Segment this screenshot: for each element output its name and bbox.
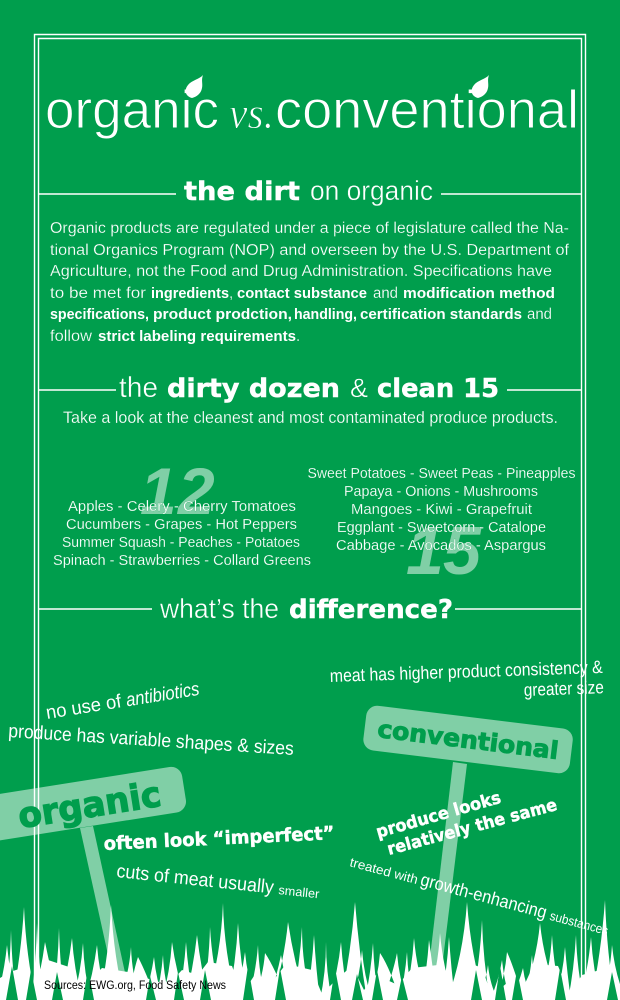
text block: the dirt on organic body: certification standards — [360, 307, 522, 323]
text block: the dirt on organic body: ingredients — [151, 286, 229, 302]
list: clean 15 — [308, 465, 576, 554]
text block: the dirt on organic body: follow — [50, 328, 93, 345]
icon: leaf over conventional — [472, 75, 489, 98]
text block: the dirt on organic body: and — [527, 306, 552, 323]
text: meat has higher product consistency: greater size — [523, 677, 604, 700]
list: clean 15: Mangoes - Kiwi - Grapefruit — [351, 501, 533, 518]
text: treated with growth-enhancing substances — [348, 851, 611, 939]
heading: the dirt on organic: on organic — [310, 175, 433, 206]
heading: the dirty dozen and clean 15: the — [119, 372, 158, 404]
text block: the dirt on organic body: Agriculture, not the Food and Drug Administration. Specifications have — [50, 263, 552, 280]
icon: leaf over organic — [186, 75, 203, 98]
text: often look imperfect: often look “imperfect” — [103, 823, 335, 855]
text: no use of antibiotics — [44, 679, 201, 724]
text: no use of antibiotics: antibiotics — [124, 679, 201, 711]
heading: the dirty dozen and clean 15: clean 15 — [377, 374, 499, 404]
text: produce looks relatively the same: produce looks — [374, 788, 503, 843]
sign post: conventional — [425, 762, 467, 1000]
title: vs. — [229, 89, 274, 138]
title: organic — [45, 80, 219, 140]
heading: what's the difference: what’s the — [159, 593, 279, 624]
text block: the dirt on organic body: strict labeling requirements — [98, 329, 296, 345]
text: treated with growth-enhancing substances: treated with — [348, 854, 420, 887]
text: cuts of meat usually smaller: cuts of meat usually — [115, 861, 275, 899]
text: cuts of meat usually smaller: smaller — [278, 883, 320, 901]
title: conventional — [275, 80, 579, 140]
text block: the dirt on organic body: . — [296, 328, 300, 345]
text block: the dirt on organic body: to be met for — [50, 285, 146, 302]
text block: the dirt on organic body — [50, 220, 570, 345]
text: meat has higher product consistency — [329, 657, 604, 700]
list: dirty dozen: Spinach - Strawberries - Collard Greens — [53, 552, 311, 569]
list: dirty dozen — [53, 498, 311, 569]
sign: conventional — [362, 704, 574, 775]
heading: the dirt on organic: the dirt — [184, 177, 300, 207]
text: produce has variable shapes and sizes: produce has variable shapes & sizes — [8, 721, 294, 760]
text block: the dirt on organic body: modification method — [403, 286, 555, 302]
sign: organic — [0, 765, 188, 844]
list: dirty dozen: Cucumbers - Grapes - Hot Peppers — [66, 516, 297, 533]
list: dirty dozen: Summer Squash - Peaches - Potatoes — [62, 534, 300, 551]
text block: the dirt on organic body: product prodction, — [153, 307, 292, 323]
list: clean 15: Sweet Potatoes - Sweet Peas - Pineapples — [308, 465, 576, 482]
number: 15: 15 — [406, 513, 482, 589]
list: dirty dozen: Apples - Celery - Cherry Tomatoes — [68, 498, 296, 515]
text block: the dirt on organic body: handling, — [294, 307, 357, 323]
number: 12: 12 — [140, 454, 215, 528]
heading: the dirty dozen and clean 15 — [38, 372, 582, 404]
text block: the dirt on organic body: contact substance — [237, 286, 367, 302]
text: produce looks relatively the same: relatively the same — [385, 795, 559, 860]
title — [45, 75, 579, 140]
text: sources: Sources: EWG.org, Food Safety News — [44, 980, 226, 992]
sign: organic: organic — [15, 775, 164, 837]
list: clean 15: Eggplant - Sweetcorn - Catalope — [337, 519, 546, 536]
text: no use of antibiotics: no use of — [44, 691, 124, 724]
text block: intro to the lists: Take a look at the cleanest and most contaminated produce products. — [63, 409, 558, 427]
heading: the dirt on organic — [38, 175, 582, 207]
text block: the dirt on organic body: Organic products are regulated under a piece of legislature called the Na- — [50, 220, 569, 237]
list: clean 15: Cabbage - Avocados - Aspargus — [336, 537, 546, 554]
text block: the dirt on organic body: specifications, — [50, 307, 149, 323]
heading: what's the difference: difference? — [289, 595, 453, 625]
heading: the dirty dozen and clean 15: & — [350, 373, 368, 403]
sign post: organic — [80, 826, 131, 1000]
heading: the dirty dozen and clean 15: dirty dozen — [167, 374, 340, 404]
text: treated with growth-enhancing substances: substances — [548, 908, 610, 938]
text block: the dirt on organic body: and — [373, 285, 398, 302]
grass — [0, 900, 620, 1000]
sign: conventional: conventional — [376, 715, 560, 765]
text block: the dirt on organic body: tional Organics Program (NOP) and overseen by the U.S. Department of — [50, 242, 570, 259]
text block: the dirt on organic body: , — [229, 285, 233, 302]
list: clean 15: Papaya - Onions - Mushrooms — [344, 483, 538, 500]
heading: what's the difference — [38, 593, 582, 625]
text: treated with growth-enhancing substances: growth-enhancing — [418, 869, 549, 922]
